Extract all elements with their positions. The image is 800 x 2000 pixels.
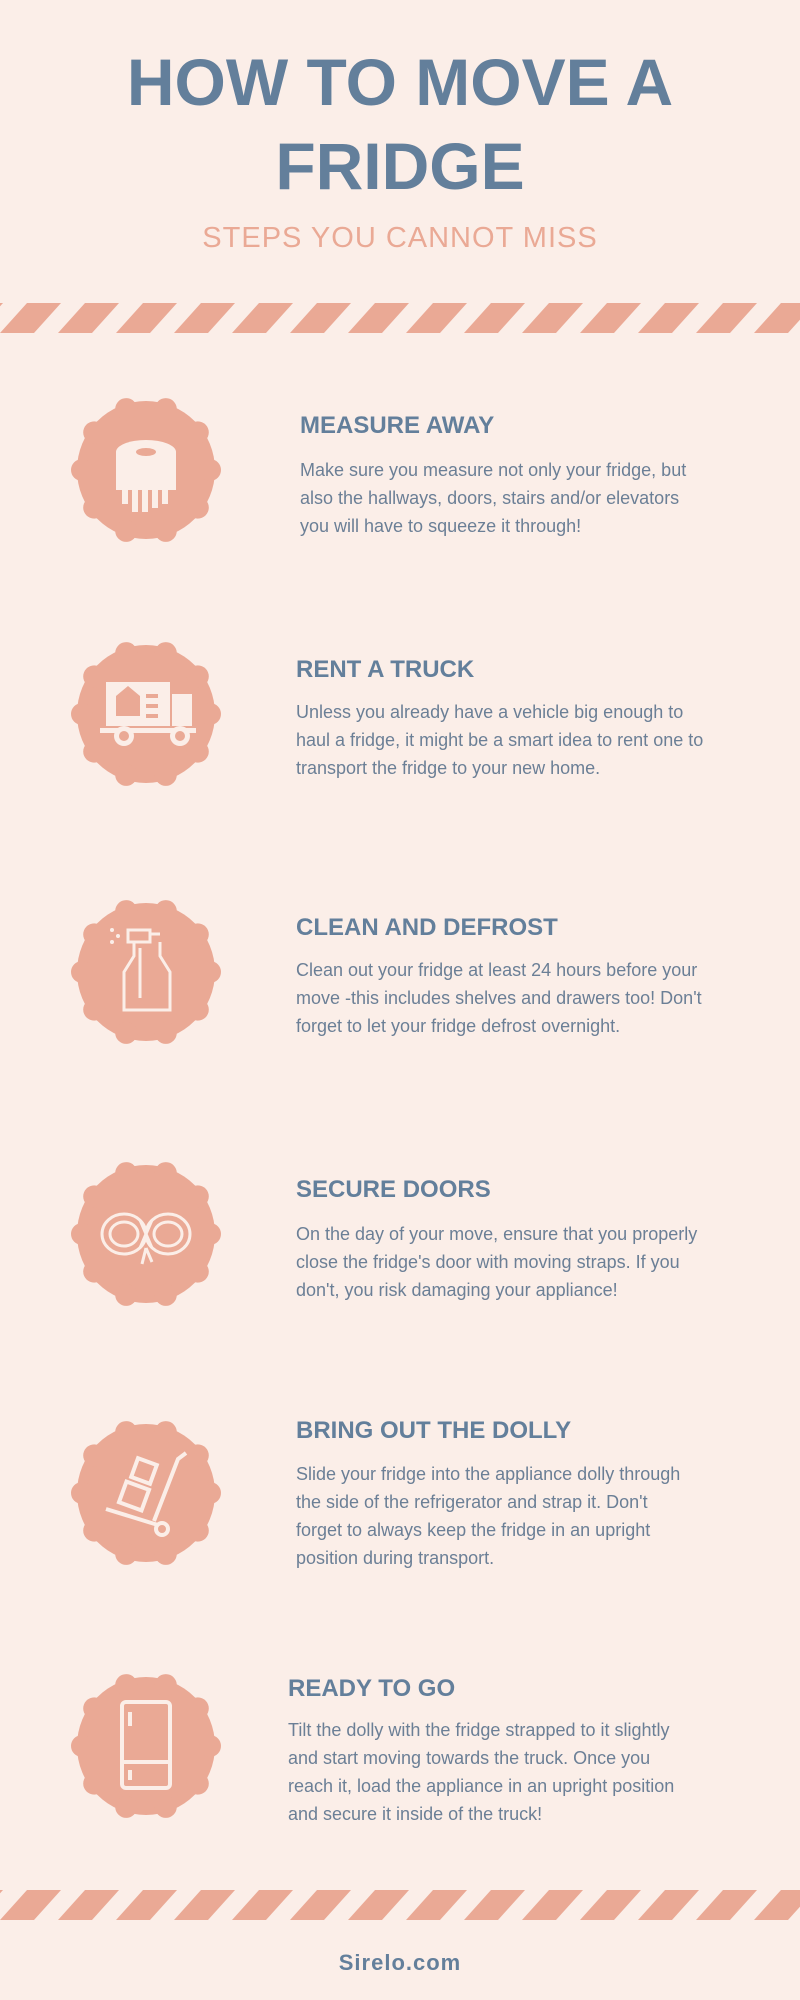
icon: tape measure: [71, 398, 221, 542]
text: Tilt the dolly with the fridge strapped to it slightly: [288, 1720, 670, 1740]
text: also the hallways, doors, stairs and/or elevators: [300, 488, 679, 508]
text: and start moving towards the truck. Once you: [288, 1748, 650, 1768]
step 2: rent a truck: [71, 642, 703, 786]
text: [288, 1720, 674, 1824]
heading: SECURE DOORS: [296, 1176, 491, 1203]
text: reach it, load the appliance in an upright position: [288, 1776, 674, 1796]
text: you will have to squeeze it through!: [300, 516, 581, 536]
title: HOW TO MOVE A: [127, 45, 673, 119]
icon: spray bottle: [71, 900, 221, 1044]
icon: fridge: [71, 1674, 221, 1818]
text: [296, 1464, 680, 1568]
text: move -this includes shelves and drawers too! Don't: [296, 988, 702, 1008]
text: forget to let your fridge defrost overnight.: [296, 1016, 620, 1036]
icon: hand truck: [71, 1421, 221, 1565]
heading: BRING OUT THE DOLLY: [296, 1417, 571, 1444]
step 4: secure doors: [71, 1162, 698, 1306]
heading: RENT A TRUCK: [296, 656, 474, 683]
text: the side of the refrigerator and strap it. Don't: [296, 1492, 648, 1512]
footer: Sirelo.com: [339, 1950, 461, 1975]
text: On the day of your move, ensure that you properly: [296, 1224, 697, 1244]
icon: rope: [71, 1162, 221, 1306]
bottom stripes: [0, 1890, 800, 1920]
text: [296, 1224, 698, 1300]
text: position during transport.: [296, 1548, 494, 1568]
text: don't, you risk damaging your appliance!: [296, 1280, 618, 1300]
text: Clean out your fridge at least 24 hours before your: [296, 960, 697, 980]
text: [296, 702, 703, 778]
text: forget to always keep the fridge in an upright: [296, 1520, 650, 1540]
heading: CLEAN AND DEFROST: [296, 914, 558, 941]
text: Unless you already have a vehicle big enough to: [296, 702, 683, 722]
icon: truck: [71, 642, 221, 786]
text: Make sure you measure not only your fridge, but: [300, 460, 686, 480]
text: transport the fridge to your new home.: [296, 758, 600, 778]
text: [300, 460, 686, 536]
text: [296, 960, 702, 1036]
step 5: bring out the dolly: [71, 1417, 680, 1568]
heading: READY TO GO: [288, 1675, 455, 1702]
text: Slide your fridge into the appliance dolly through: [296, 1464, 680, 1484]
text: and secure it inside of the truck!: [288, 1804, 542, 1824]
heading: MEASURE AWAY: [300, 412, 494, 439]
title: [127, 45, 673, 203]
step 1: measure away: [71, 398, 686, 542]
title: FRIDGE: [275, 129, 525, 203]
subtitle: STEPS YOU CANNOT MISS: [202, 222, 598, 254]
top stripes: [0, 303, 800, 333]
step 3: clean and defrost: [71, 900, 702, 1044]
step 6: ready to go: [71, 1674, 674, 1824]
text: haul a fridge, it might be a smart idea to rent one to: [296, 730, 703, 750]
text: close the fridge's door with moving straps. If you: [296, 1252, 680, 1272]
